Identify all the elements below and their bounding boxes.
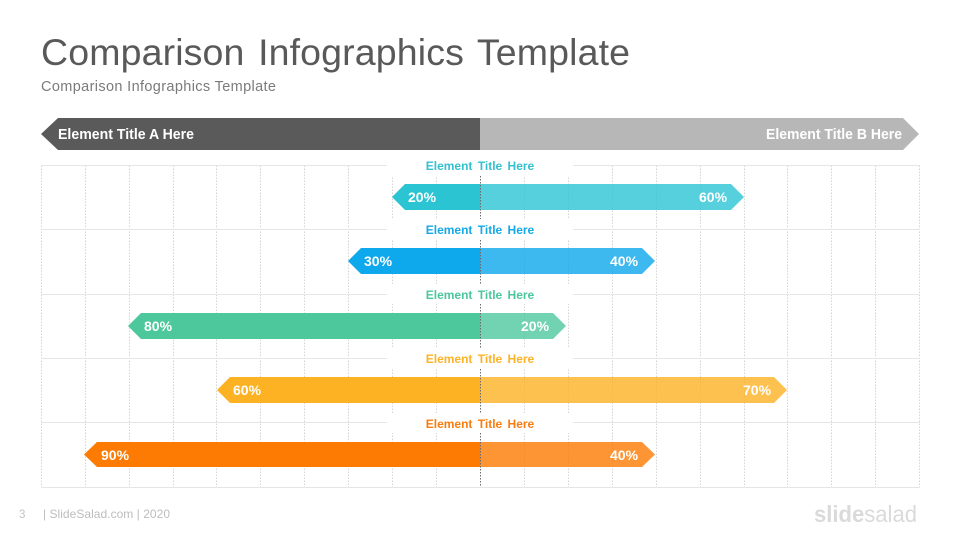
row 1 <box>392 159 744 210</box>
row 4 bar B <box>480 377 787 403</box>
row 1 bar B <box>480 184 744 210</box>
row 4 label: Element Title Here <box>426 352 535 366</box>
logo wordmark: slidesalad <box>814 501 917 527</box>
header arrow: element A <box>41 118 480 150</box>
row 2 bar B <box>480 248 655 274</box>
row 1 label: Element Title Here <box>426 159 535 173</box>
row 3 <box>128 288 566 339</box>
row 5 value A: 90% <box>101 447 130 463</box>
row 5 label: Element Title Here <box>426 417 535 431</box>
title: Comparison Infographics Template <box>41 31 630 73</box>
row 4 <box>217 352 787 403</box>
row 4 value A: 60% <box>233 382 262 398</box>
subtitle: Comparison Infographics Template <box>41 79 276 95</box>
center axis <box>480 176 482 487</box>
row 3 bar A <box>128 313 480 339</box>
row 5 bar B <box>480 442 655 467</box>
row 2 label: Element Title Here <box>426 223 535 237</box>
header arrow: element B <box>480 118 919 150</box>
row 5 value B: 40% <box>610 447 639 463</box>
row 5 <box>84 417 655 467</box>
row 2 value A: 30% <box>364 253 393 269</box>
row 3 label: Element Title Here <box>426 288 535 302</box>
row 1 bar A <box>392 184 480 210</box>
row 4 bar A <box>217 377 480 403</box>
row 2 bar A <box>348 248 480 274</box>
row 1 value A: 20% <box>408 189 437 205</box>
row 3 value B: 20% <box>521 318 550 334</box>
row 3 value A: 80% <box>144 318 173 334</box>
footer text: | SlideSalad.com | 2020 <box>43 507 170 521</box>
header arrow: element B: Element Title B Here <box>766 127 902 143</box>
row 1 value B: 60% <box>699 189 728 205</box>
row 5 bar A <box>84 442 480 467</box>
page number: 3 <box>19 509 25 521</box>
row 2 <box>348 223 655 274</box>
row 2 value B: 40% <box>610 253 639 269</box>
header arrow: element A: Element Title A Here <box>58 127 194 143</box>
comparison grid <box>41 155 920 488</box>
row 3 bar B <box>480 313 566 339</box>
row 4 value B: 70% <box>743 382 772 398</box>
